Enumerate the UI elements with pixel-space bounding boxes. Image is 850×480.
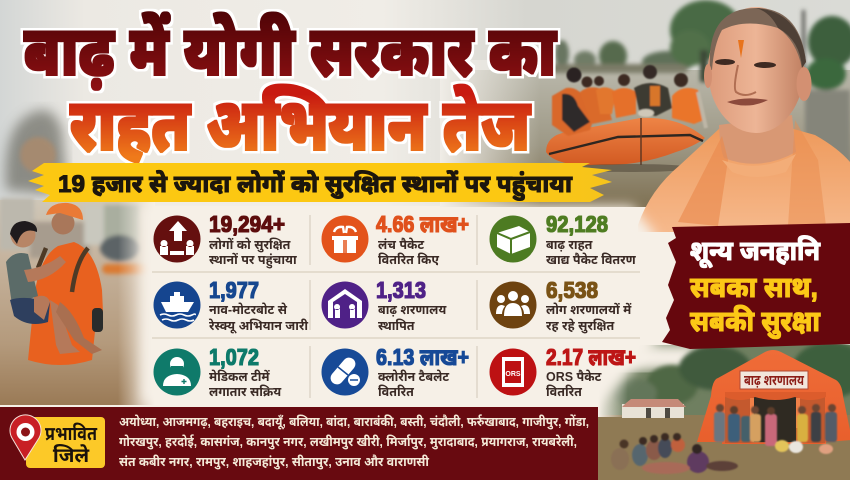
icon: location pin xyxy=(10,415,41,460)
callout: zero casualties xyxy=(662,223,850,349)
rescuer body xyxy=(28,242,103,365)
district list xyxy=(119,414,589,471)
stat: food packets xyxy=(490,211,637,267)
people at the tent xyxy=(714,404,837,454)
badge: affected districts: जिले xyxy=(53,443,90,467)
child xyxy=(10,222,36,248)
icon: boat on waves xyxy=(154,282,200,328)
stat: people in shelters: 6,538 xyxy=(546,277,598,303)
stat: medical teams: लगातार सक्रिय xyxy=(209,384,282,399)
stat: ORS packets xyxy=(490,344,636,399)
district list: अयोध्या, आजमगढ़, बहराइच, बदायूँ, बलिया, बांदा, बाराबंकी, बस्ती, चंदौली, फर्रुखाबाद, गाजीपुर, गोंडा, xyxy=(119,414,589,431)
stats grid xyxy=(152,211,640,399)
district list: गोरखपुर, हरदोई, कासगंज, कानपुर नगर, लखीमपुर खीरी, मिर्जापुर, मुरादाबाद, प्रयागराज, रायबरेली, xyxy=(119,434,577,451)
stat: chlorine tablets: वितरित xyxy=(378,384,414,399)
photo: flood relief tent scene xyxy=(598,342,850,480)
stat: boats xyxy=(154,277,308,334)
stat: ORS packets: ORS पैकेट xyxy=(546,369,602,384)
affected districts bar xyxy=(0,407,598,480)
callout line 3: सबकी सुरक्षा xyxy=(690,305,820,339)
stat: people moved to safety: 19,294+ xyxy=(209,211,285,237)
icon: ORS packet xyxy=(490,348,536,396)
subtitle banner xyxy=(28,163,612,202)
callout line 2: सबका साथ, xyxy=(690,272,818,304)
icon: group of people xyxy=(490,282,536,328)
soft fade from title area into the photo xyxy=(440,60,540,207)
stat: boats: रेस्क्यू अभियान जारी xyxy=(208,318,308,334)
badge: affected districts xyxy=(10,415,105,468)
icon: house with people xyxy=(322,282,368,328)
people seated in water xyxy=(611,433,738,474)
icon: ORS packet: ORS xyxy=(505,371,521,378)
title line 1: बाढ़ में योगी सरकार का xyxy=(24,12,557,91)
photo: rescuer carrying a child xyxy=(0,198,155,405)
tent sign: बाढ़ शरणालय xyxy=(744,373,805,389)
stat: chlorine tablets: 6.13 लाख+ xyxy=(376,344,469,370)
stat: people moved to safety: स्थानों पर पहुंचाया xyxy=(209,252,297,269)
relief tent xyxy=(697,350,850,444)
soft panel behind the stats xyxy=(142,206,655,403)
stat: ORS packets: 2.17 लाख+ xyxy=(546,344,636,370)
stat: lunch packets: 4.66 लाख+ xyxy=(376,211,469,237)
title line 2: राहत अभियान तेज xyxy=(70,83,531,166)
stat: lunch packets xyxy=(322,211,469,267)
stat: shelters: 1,313 xyxy=(376,277,426,303)
stat: people moved to safety: लोगों को सुरक्षित xyxy=(209,237,291,254)
stat: food packets: 92,128 xyxy=(546,211,608,237)
stat: shelters xyxy=(322,277,447,333)
icon: doctor xyxy=(154,348,200,396)
photo: rescue boat on flood water xyxy=(440,0,850,207)
stat: people in shelters: लोग शरणालयों में xyxy=(546,302,632,317)
stat: shelters: बाढ़ शरणालय xyxy=(378,303,447,317)
icon: lunch box xyxy=(322,216,368,262)
title xyxy=(24,12,557,166)
small house xyxy=(622,399,686,418)
rescue boat xyxy=(546,65,706,172)
stat: medical teams xyxy=(154,344,282,399)
badge: affected districts: प्रभावित xyxy=(45,423,98,445)
stat: shelters: स्थापित xyxy=(378,318,415,333)
stat: chlorine tablets xyxy=(322,344,469,399)
stat: chlorine tablets: क्लोरीन टैबलेट xyxy=(378,369,449,384)
stat: boats: 1,977 xyxy=(209,277,259,303)
subtitle text: 19 हजार से ज्यादा लोगों को सुरक्षित स्थानों पर पहुंचाया xyxy=(58,170,573,201)
stat: people in shelters: रह रहे सुरक्षित xyxy=(546,318,614,335)
stat: lunch packets: लंच पैकेट xyxy=(378,237,424,252)
icon: people and arrow xyxy=(154,216,200,262)
stat: people in shelters xyxy=(490,277,632,335)
icon: capsule and tablet xyxy=(322,348,368,396)
district list: संत कबीर नगर, रामपुर, शाहजहांपुर, सीतापुर, उनाव और वाराणसी xyxy=(119,454,430,471)
stat: medical teams: 1,072 xyxy=(209,344,259,370)
photo: leader portrait in saffron robe xyxy=(638,7,850,232)
stat: food packets: बाढ़ राहत xyxy=(546,238,593,252)
stat: people moved to safety xyxy=(154,211,297,269)
stat: ORS packets: वितरित xyxy=(546,384,582,399)
stat: lunch packets: वितरित किए xyxy=(378,252,439,267)
callout line 1: शून्य जनहानि xyxy=(690,236,821,268)
icon: package box xyxy=(490,216,536,262)
stat: boats: नाव-मोटरबोट से xyxy=(209,302,288,317)
stat: medical teams: मेडिकल टीमें xyxy=(209,369,271,384)
stat: food packets: खाद्य पैकेट वितरण xyxy=(546,252,637,267)
